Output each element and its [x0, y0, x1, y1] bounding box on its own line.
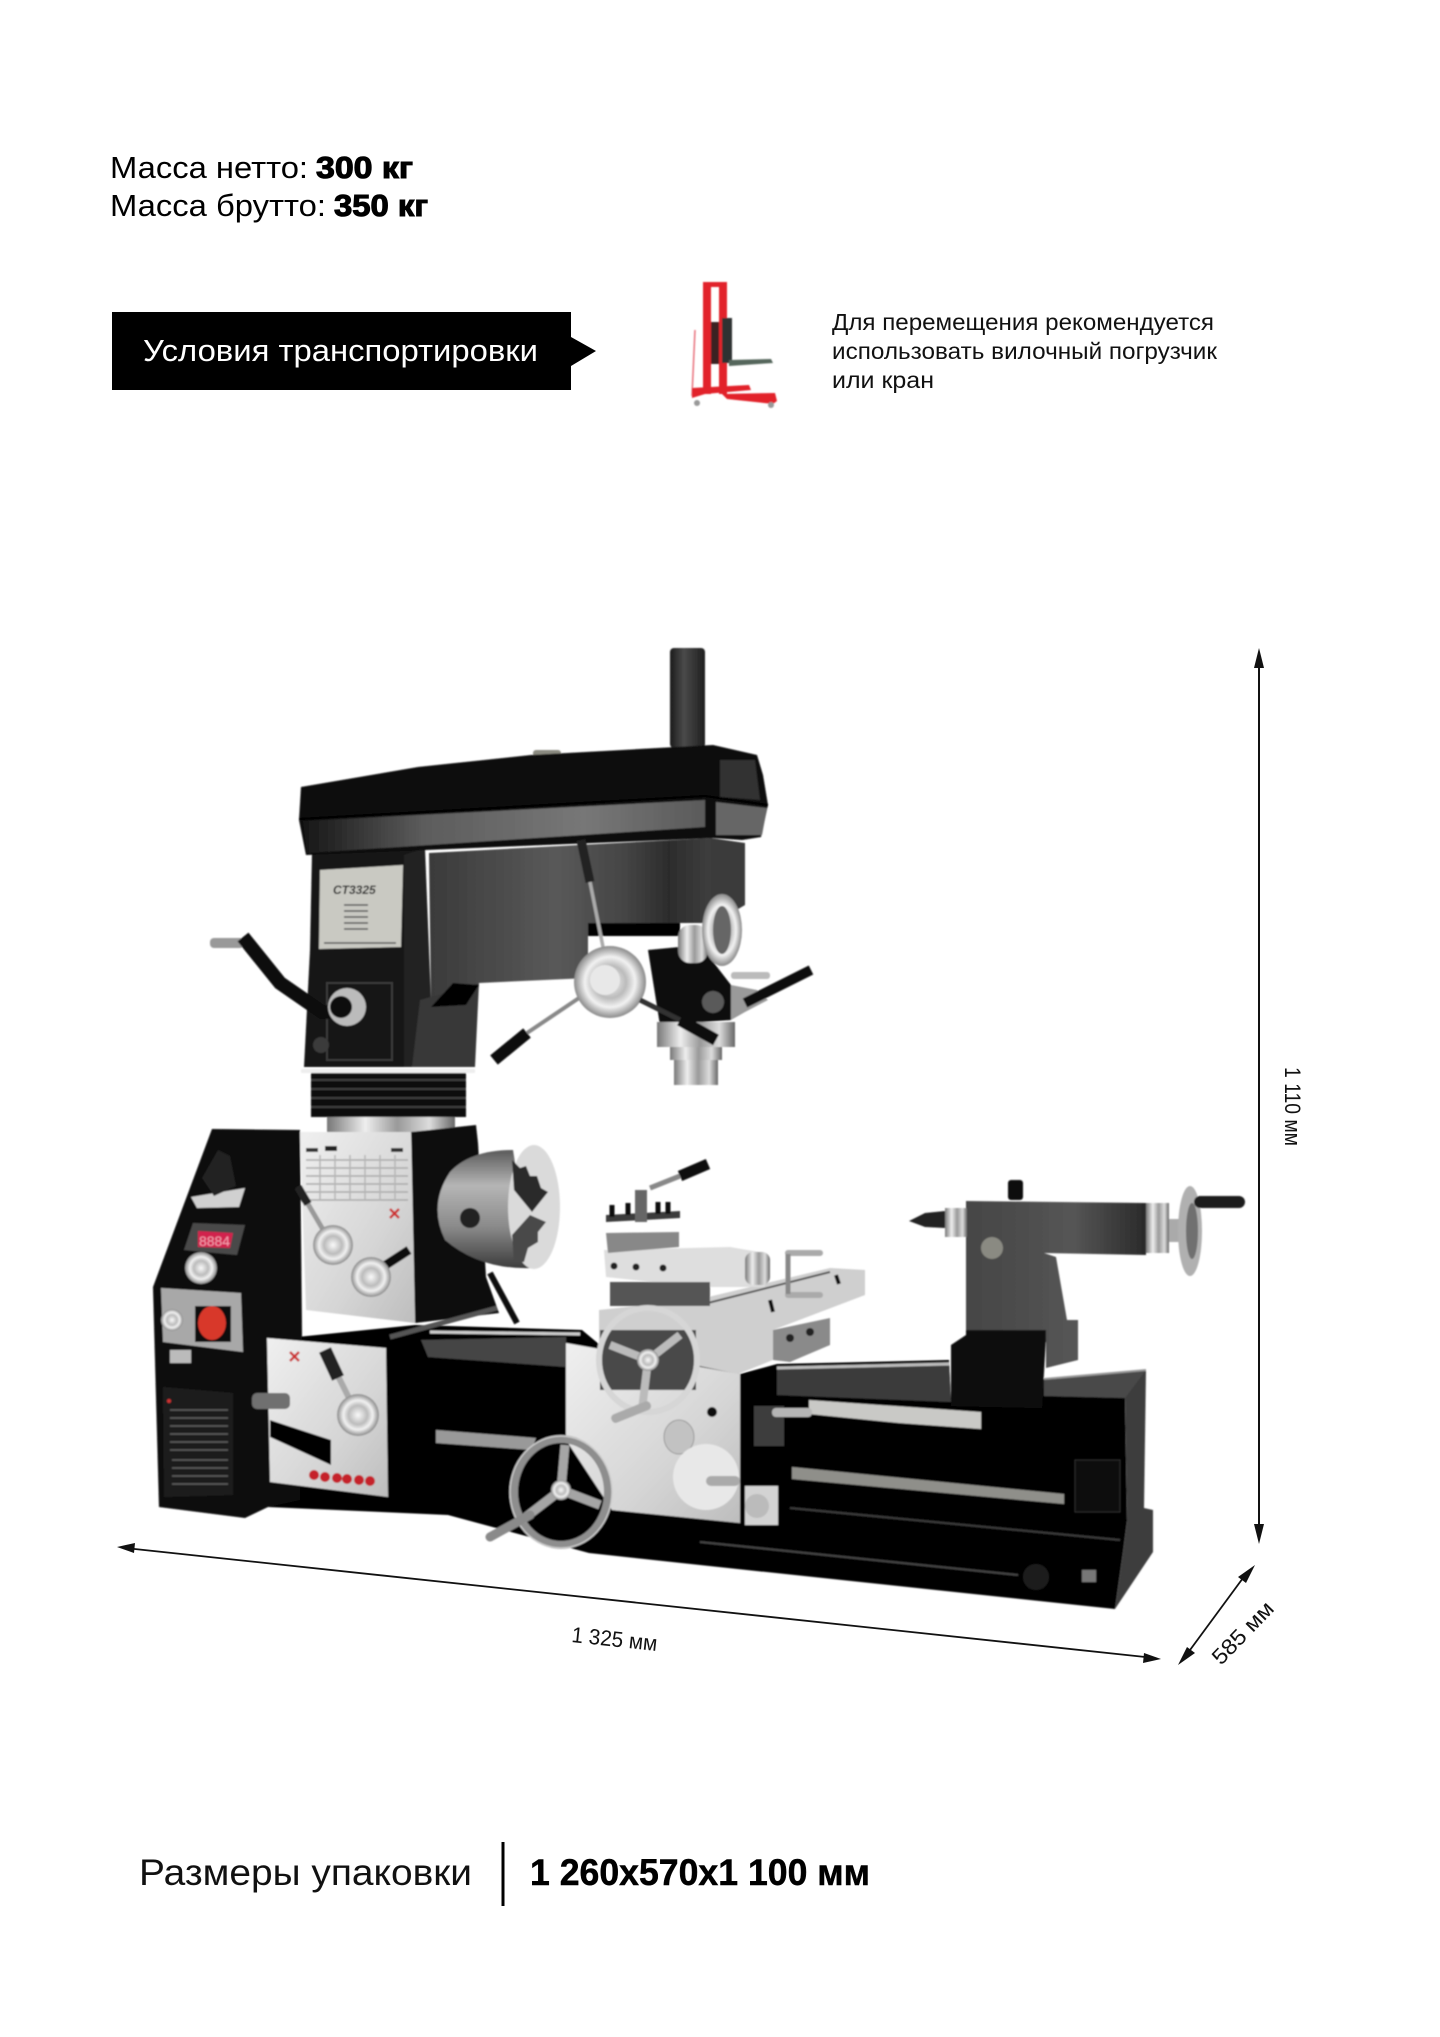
bellows column	[301, 1069, 475, 1133]
label: length: 1 325 мм	[570, 1622, 659, 1656]
label: height: 1 110 мм	[1280, 1067, 1305, 1146]
machine: combined lathe and drill-mill	[153, 648, 1245, 1609]
lathe bed	[268, 1325, 1153, 1609]
tailstock	[909, 1180, 1245, 1408]
packaging size row	[139, 1842, 870, 1906]
label: depth: 585 мм	[1207, 1596, 1279, 1669]
transport recommendation text: Для перемещения рекомендуется	[832, 309, 1214, 335]
control box: 8884	[199, 1233, 230, 1249]
icon: red manual forklift	[692, 282, 777, 408]
transport conditions label	[112, 312, 596, 390]
packaging size row: 1 260x570x1 100 мм	[530, 1852, 870, 1893]
transport recommendation text: или кран	[832, 367, 934, 393]
arrow: height dimension	[1254, 648, 1264, 1544]
weight text block: 300 кг	[316, 150, 413, 185]
weight text block	[110, 150, 428, 223]
apron	[566, 1343, 778, 1525]
nameplate	[319, 865, 403, 949]
arrow: depth dimension	[1178, 1565, 1255, 1665]
weight text block: Масса брутто:	[110, 188, 326, 223]
packaging size row: Размеры упаковки	[139, 1852, 472, 1893]
headstock panel with gear levers	[298, 1125, 517, 1323]
nameplate: CT3325	[333, 883, 376, 897]
weight text block: 350 кг	[334, 188, 428, 223]
left crank handle	[210, 937, 392, 1060]
chuck	[438, 1145, 560, 1269]
transport conditions label: Условия транспортировки	[143, 333, 538, 368]
transport recommendation text	[832, 309, 1218, 393]
feed gearbox panel	[252, 1308, 497, 1497]
quill feed and spindle	[494, 840, 811, 1085]
control box	[153, 1129, 302, 1518]
upper handwheel	[599, 1308, 697, 1424]
carriage and compound slide	[599, 1164, 865, 1374]
weight text block: Масса нетто:	[110, 150, 308, 185]
arrow: length dimension	[117, 1543, 1161, 1663]
drill head upper unit	[210, 648, 811, 1085]
transport recommendation text: использовать вилочный погрузчик	[832, 338, 1218, 364]
lower handwheel	[490, 1436, 612, 1548]
